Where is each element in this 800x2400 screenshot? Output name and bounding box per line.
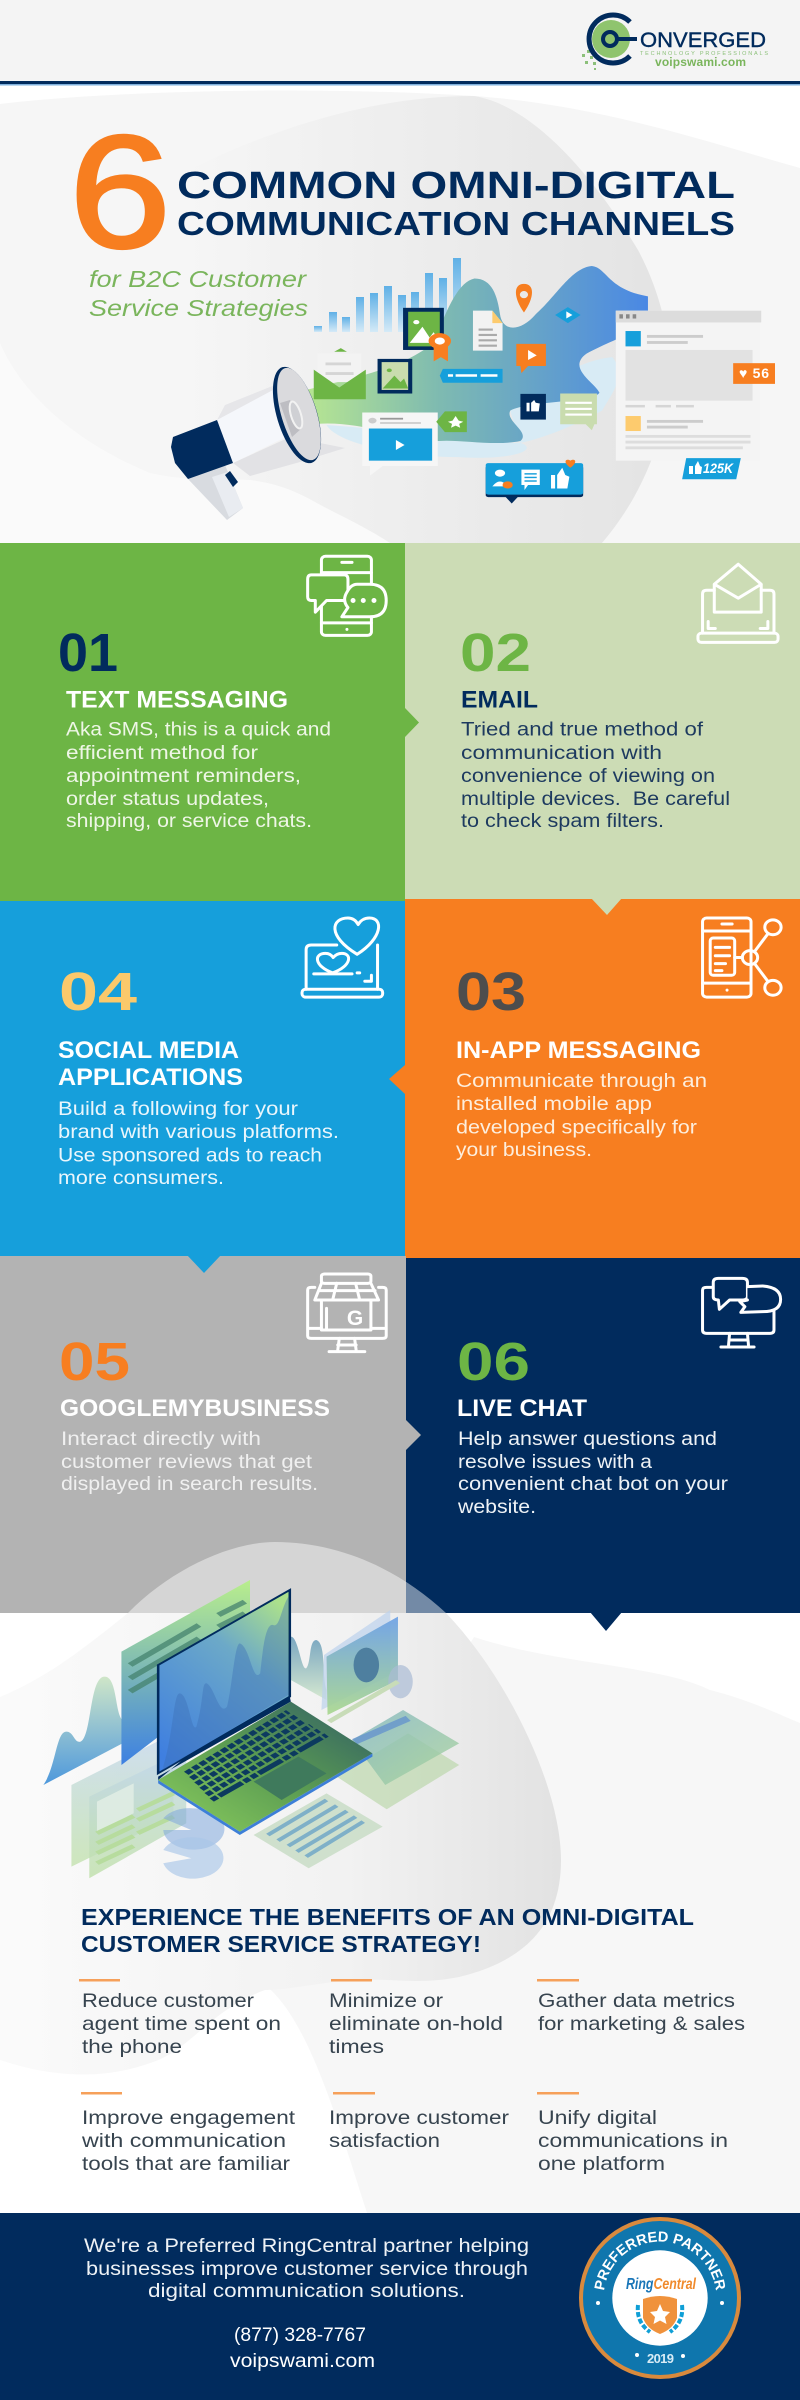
benefit: minimize on-hold (329, 1979, 503, 2058)
footer message (84, 2235, 529, 2302)
panel: 03 in-app messaging (405, 899, 800, 1258)
description: communication with (461, 743, 662, 764)
illustration: isometric laptop and charts (43, 1580, 459, 1879)
description: Tried and true method of (461, 720, 704, 740)
heading: LIVE CHAT (457, 1395, 587, 1422)
subtitle: for B2C Customer (89, 266, 308, 292)
heading (58, 1037, 243, 1091)
description: Help answer questions and (458, 1429, 717, 1450)
description: convenience of viewing on (461, 766, 715, 787)
heading: APPLICATIONS (58, 1064, 243, 1091)
description: resolve issues with a (458, 1452, 652, 1473)
logo: Converged: TECHNOLOGY PROFESSIONALS (640, 51, 768, 57)
panel: 04 social media (0, 901, 405, 1256)
benefit: gather data: Gather data metrics (538, 1990, 735, 2012)
footer contact: voipswami.com (230, 2351, 375, 2372)
title: COMMUNICATION CHANNELS (177, 205, 735, 242)
benefit: customer satisfaction (329, 2092, 510, 2152)
description: displayed in search results. (61, 1474, 318, 1495)
benefit: minimize on-hold: Minimize or (329, 1990, 444, 2012)
description (61, 1429, 318, 1495)
footer contact: (877) 328-7767 (234, 2325, 366, 2346)
trackpad (254, 1757, 327, 1800)
arrow: navy panel pointer (590, 1612, 622, 1631)
star tag (436, 411, 467, 432)
icon: laptop with envelope (698, 564, 778, 642)
email (314, 348, 366, 399)
panel: 01 text messaging (0, 543, 405, 901)
number 04: 04 (59, 962, 137, 1022)
title (177, 165, 735, 242)
heading: EMAIL (461, 686, 538, 714)
social window (616, 311, 761, 461)
heading: GOOGLEMYBUSINESS (60, 1395, 330, 1422)
preferred partner badge (579, 2217, 741, 2379)
video card (362, 412, 438, 476)
footer message: digital communication solutions. (148, 2280, 465, 2302)
arrow: blue panel pointer (187, 1255, 221, 1273)
description (461, 720, 730, 832)
subtitle (89, 266, 309, 321)
benefit: customer satisfaction: satisfaction (329, 2130, 440, 2152)
benefits heading: EXPERIENCE THE BENEFITS OF AN OMNI-DIGITAL (81, 1904, 694, 1930)
logo: Converged (582, 15, 768, 70)
number 02: 02 (460, 623, 531, 683)
hero illustration: digital channels (296, 266, 775, 504)
left data sheet (121, 1580, 250, 1765)
icon: monitor with storefront (308, 1274, 386, 1352)
logo: Converged: voipswami.com (655, 55, 746, 69)
award ribbon (429, 333, 451, 361)
benefit: improve engagement: tools that are familiar (82, 2153, 291, 2175)
number 01: 01 (58, 623, 118, 683)
description: Communicate through an (456, 1071, 707, 1092)
like count: ♥ 56 (739, 365, 769, 381)
description: efficient method for (66, 743, 259, 764)
description: multiple devices. Be careful (461, 789, 730, 810)
heading: IN-APP MESSAGING (456, 1037, 701, 1064)
description: Build a following for your (58, 1099, 299, 1120)
description (58, 1099, 339, 1189)
description (66, 720, 331, 832)
benefit: unify digital: Unify digital (538, 2107, 657, 2129)
footer message: businesses improve customer service through (86, 2258, 528, 2280)
hero background shapes (0, 86, 800, 544)
number 06: 06 (457, 1332, 530, 1392)
icon: phone with network (703, 918, 781, 997)
benefit: improve engagement (81, 2092, 296, 2175)
footer message: We're a Preferred RingCentral partner helping (84, 2235, 529, 2257)
description: order status updates, (66, 789, 269, 810)
benefit: reduce agent time (79, 1979, 281, 2058)
description: developed specifically for (456, 1118, 698, 1138)
icon: monitor with storefront: G (347, 1307, 363, 1330)
benefit: minimize on-hold: eliminate on-hold (329, 2013, 503, 2035)
social bar (486, 460, 583, 504)
description: appointment reminders, (66, 766, 301, 787)
benefit: customer satisfaction: Improve customer (329, 2107, 510, 2129)
heading: TEXT MESSAGING (66, 686, 288, 714)
description: Use sponsored ads to reach (58, 1146, 322, 1166)
laptop screen (158, 1590, 290, 1773)
description: Interact directly with (61, 1429, 261, 1450)
description (457, 1429, 729, 1518)
pie charts (163, 1808, 224, 1879)
heading: SOCIAL MEDIA (58, 1037, 239, 1064)
big number 6: 6 (69, 102, 171, 281)
benefit: reduce agent time: the phone (82, 2036, 182, 2058)
bar chart decoration (314, 258, 461, 332)
benefit: gather data: for marketing & sales (538, 2013, 745, 2035)
bottom sheet with lines (254, 1793, 383, 1868)
pale blue glow behind blob (327, 357, 619, 458)
laptop base (158, 1697, 372, 1835)
like badge background (733, 363, 775, 384)
panel: 05 google my business (0, 1256, 406, 1613)
benefit: reduce agent time: agent time spent on (82, 2013, 281, 2035)
image frame one (403, 308, 444, 350)
preferred partner badge: PREFERRED PARTNER (594, 2232, 726, 2290)
arrow: gray panel pointer (406, 1420, 421, 1450)
keyboard (186, 1712, 327, 1800)
views badge background (682, 458, 741, 479)
arrow: green panel pointer (405, 708, 419, 737)
lower section background shapes (128, 1542, 561, 2064)
description: customer reviews that get (61, 1452, 313, 1473)
logo: Converged: ONVERGED (640, 29, 766, 52)
arrow: light green panel pointer (591, 898, 622, 915)
benefit: improve engagement: Improve engagement (82, 2107, 296, 2129)
description: to check spam filters. (461, 811, 664, 832)
subtitle: Service Strategies (89, 295, 309, 321)
megaphone (171, 361, 345, 520)
description: your business. (456, 1140, 592, 1161)
panel: 06 live chat (406, 1258, 800, 1613)
footer band (0, 2213, 800, 2400)
preferred partner badge: RingCentral (626, 2276, 697, 2293)
view count (689, 460, 734, 476)
header band (0, 0, 800, 86)
map pin (516, 284, 532, 312)
description: brand with various platforms. (58, 1122, 339, 1143)
right sheet (321, 1610, 413, 1722)
icon: laptop with heart (302, 918, 383, 997)
orange play bubble (516, 344, 546, 373)
image frame two (378, 359, 412, 394)
benefit: improve engagement: with communication (81, 2130, 286, 2152)
document (473, 311, 503, 351)
lower right sheets (337, 1710, 459, 1809)
description (456, 1071, 707, 1161)
description: website. (457, 1497, 536, 1518)
right peaks (291, 1637, 327, 1700)
left lower sheets (71, 1733, 186, 1878)
preferred partner badge: 2019 (647, 2351, 674, 2366)
number 05: 05 (59, 1332, 130, 1392)
arrow: orange panel pointer (389, 1065, 405, 1094)
benefit: unify digital: communications in (538, 2130, 728, 2152)
eye tag (555, 307, 581, 323)
description: more consumers. (58, 1168, 224, 1189)
left peak chart (43, 1677, 122, 1785)
number 03: 03 (456, 962, 526, 1022)
title: COMMON OMNI-DIGITAL (177, 165, 735, 207)
benefits heading (81, 1904, 694, 1957)
benefit: reduce agent time: Reduce customer (82, 1990, 255, 2012)
view count: 125K (703, 460, 734, 476)
benefit: unify digital: one platform (538, 2153, 665, 2175)
benefit: minimize on-hold: times (329, 2036, 384, 2058)
description: installed mobile app (456, 1094, 652, 1115)
benefit: gather data (537, 1979, 745, 2035)
description: Aka SMS, this is a quick and (66, 720, 331, 740)
thumb icon (520, 394, 546, 420)
benefits heading: CUSTOMER SERVICE STRATEGY! (81, 1931, 481, 1957)
icon: monitor with chat bubbles (703, 1278, 781, 1347)
comment bubble (560, 394, 597, 430)
benefit: unify digital (537, 2092, 728, 2175)
panel: 02 email (405, 543, 800, 899)
blue tag (440, 369, 503, 383)
colour blob (296, 266, 648, 443)
description: shipping, or service chats. (66, 811, 312, 832)
footer contact (230, 2325, 375, 2372)
description: convenient chat bot on your (458, 1474, 729, 1495)
icon: phone with chat bubbles (308, 556, 386, 635)
